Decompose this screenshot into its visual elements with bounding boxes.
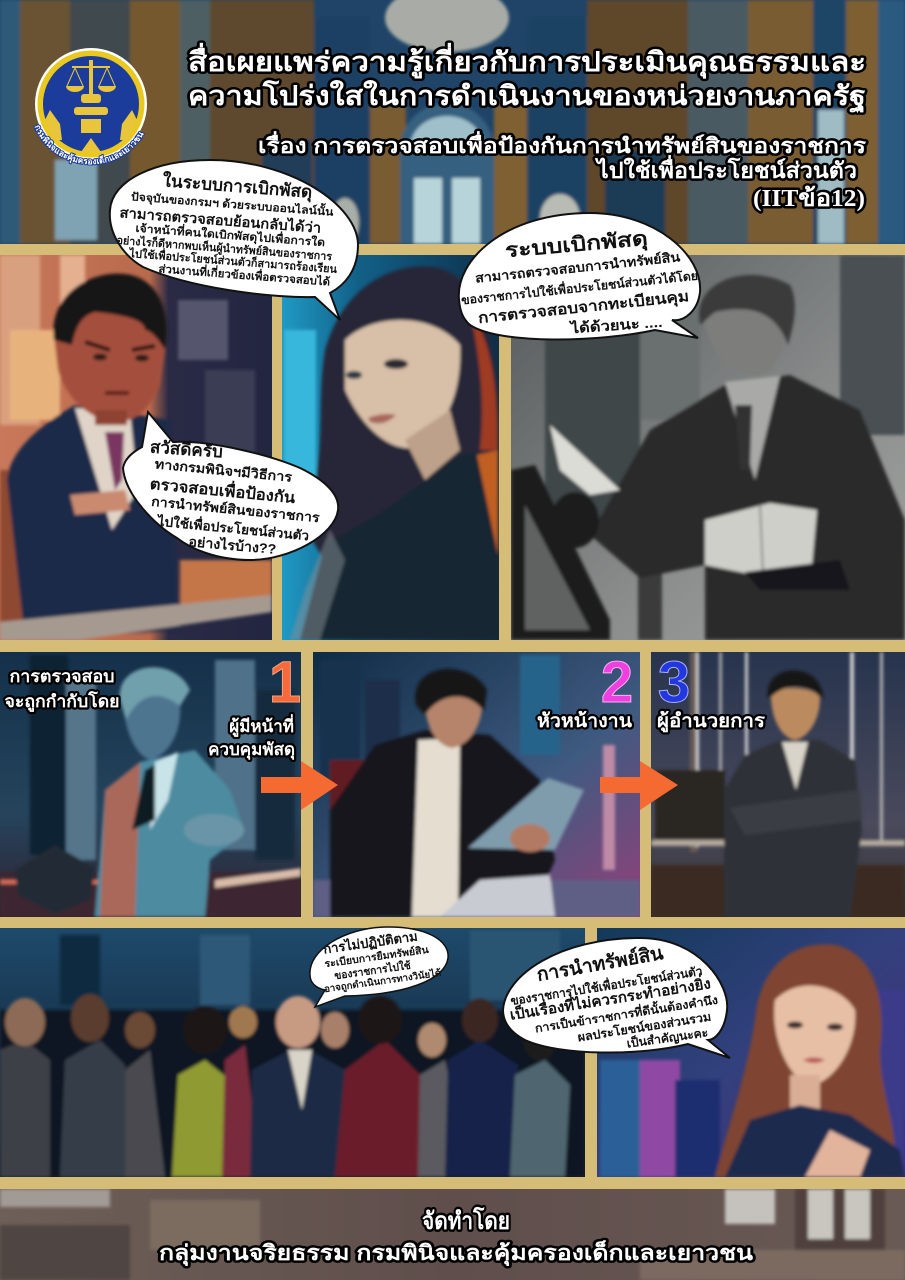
panel: crowd [0,928,585,1177]
speech bubble: greeting question: ไปใช้เพื่อประโยชน์ส่วนตัว [155,511,310,543]
subtitle: ไปใช้เพื่อประโยชน์ส่วนตัว [595,154,857,183]
speech bubble: greeting question: การนำทรัพย์สินของราชการ [151,494,320,525]
panel: step 3 director [651,652,905,917]
speech bubble: penalty warning: ระเบียบการยืมทรัพย์สิน [324,944,430,970]
logo [33,48,147,166]
panel: step 1 officer [0,652,301,917]
speech bubble: greeting question: สวัสดีครับ [149,436,224,462]
speech bubble: requisition system: ระบบเบิกพัสดุ [504,228,649,263]
number 1: 1 [269,650,301,715]
label: inspection intro: การตรวจสอบ [10,667,114,686]
speech bubble: system intro [110,160,358,320]
title: สื่อเผยแพร่ความรู้เกี่ยวกับการประเมินคุณธรรมและ [188,42,866,79]
subtitle: (IITข้อ12) [753,185,865,212]
subtitle [258,130,867,212]
speech bubble: penalty warning [310,927,448,1007]
panel: man in navy suit [0,255,272,640]
arrow: step 1 to step 2 [261,761,338,810]
label: inspection intro [4,667,120,713]
speech bubble: system intro: อย่างไรก็ดีหากพบเห็นผู้นำทรัพย์สินของราชการ [116,233,333,264]
speech bubble: requisition system [459,213,700,340]
footer text [159,1206,754,1267]
number 3: 3 [658,650,690,715]
label: supply officer: ผู้มีหน้าที่ [229,714,294,738]
speech bubble: greeting question: อย่างไรบ้าง?? [188,533,277,557]
panel: woman in leather jacket [282,255,499,640]
speech bubble: penalty warning: ของราชการไปใช้ [333,958,412,982]
label: inspection intro: จะถูกกำกับโดย [4,691,120,713]
label: supervisor: หัวหน้างาน [537,710,632,732]
arrow: step 2 to step 3 [600,761,678,810]
speech bubble: greeting question: ทางกรมพินิจฯมีวิธีการ [154,456,293,485]
face features: woman [346,371,362,379]
panel: footer [0,1189,905,1280]
speech bubble: requisition system: สามารถตรวจสอบการนำทรัพย์สิน [474,249,681,286]
speech bubble: greeting question: ตรวจสอบเพื่อป้องกัน [149,472,297,507]
footer text: กลุ่มงานจริยธรรม กรมพินิจและคุ้มครองเด็กและเยาวชน [159,1239,754,1267]
label: supply officer: ควบคุมพัสดุ [208,740,295,760]
title: ความโปร่งใสในการดำเนินงานของหน่วยงานภาครัฐ [188,79,866,114]
speech bubble: closing message: เป็นสำคัญนะคะ [626,1024,709,1051]
speech bubble: requisition system: ได้ด้วยนะ .... [568,313,663,336]
speech bubble: penalty warning: การไม่ปฏิบัติตาม [322,928,419,958]
speech bubble: system intro: สามารถตรวจสอบย้อนกลับได้ว่า [119,203,322,236]
footer text: จัดทำโดย [422,1206,510,1235]
icon: scales [45,60,137,152]
label: director: ผู้อำนวยการ [657,710,766,733]
speech bubble: closing message: การเป็นข้าราชการที่ดีนั้นต้องคำนึง [534,991,719,1035]
subtitle: เรื่อง การตรวจสอบเพื่อป้องกันการนำทรัพย์สินของราชการ [258,130,867,158]
speech bubble: system intro: ไปใช้เพื่อประโยชน์ส่วนตัวก็สามารถร้องเรียน [127,245,338,276]
speech bubble: closing message: ผลประโยชน์ของส่วนรวม [576,1009,712,1045]
speech bubble: system intro: เจ้าหน้าที่คนใดเบิกพัสดุไปเพื่อการใด [135,220,326,250]
face features: man [85,342,155,350]
logo caption [34,125,148,164]
speech bubble: closing message [503,938,730,1058]
speech bubble: requisition system: ของราชการไปใช้เพื่อประโยชน์ส่วนตัวได้โดย [460,267,699,307]
logo: กรมพินิจและคุ้มครองเด็กและเยาวชน [33,124,145,166]
panel: step 2 supervisor [313,652,640,917]
speech bubble: system intro: ปัจจุบันของกรมฯ ด้วยระบบออนไลน์นั้น [130,188,335,220]
speech bubble: requisition system: การตรวจสอบจากทะเบียนคุม [477,288,690,328]
speech bubble: system intro: ส่วนงานที่เกี่ยวข้องเพื่อตรวจสอบได้ [158,260,331,289]
face features: city woman [787,1022,803,1028]
speech bubble: penalty warning: อาจถูกดำเนินการทางวินัยได้ [323,967,442,996]
panel: woman in cyber city [597,928,905,1177]
speech bubble: system intro: ในระบบการเบิกพัสดุ [162,170,313,203]
number 2: 2 [601,650,633,715]
label: supply officer [208,714,295,760]
header panel [0,0,905,246]
speech bubble: closing message: เป็นเรื่องที่ไม่ควรกระทำอย่างยิ่ง [508,972,712,1024]
speech bubble: greeting question [123,412,338,560]
speech bubble: closing message: ของราชการไปใช้เพื่อประโยชน์ส่วนตัว [509,962,704,1008]
speech bubble: closing message: การนำทรัพย์สิน [535,942,665,986]
title [188,42,866,114]
panel: grey man holding box [511,255,905,640]
